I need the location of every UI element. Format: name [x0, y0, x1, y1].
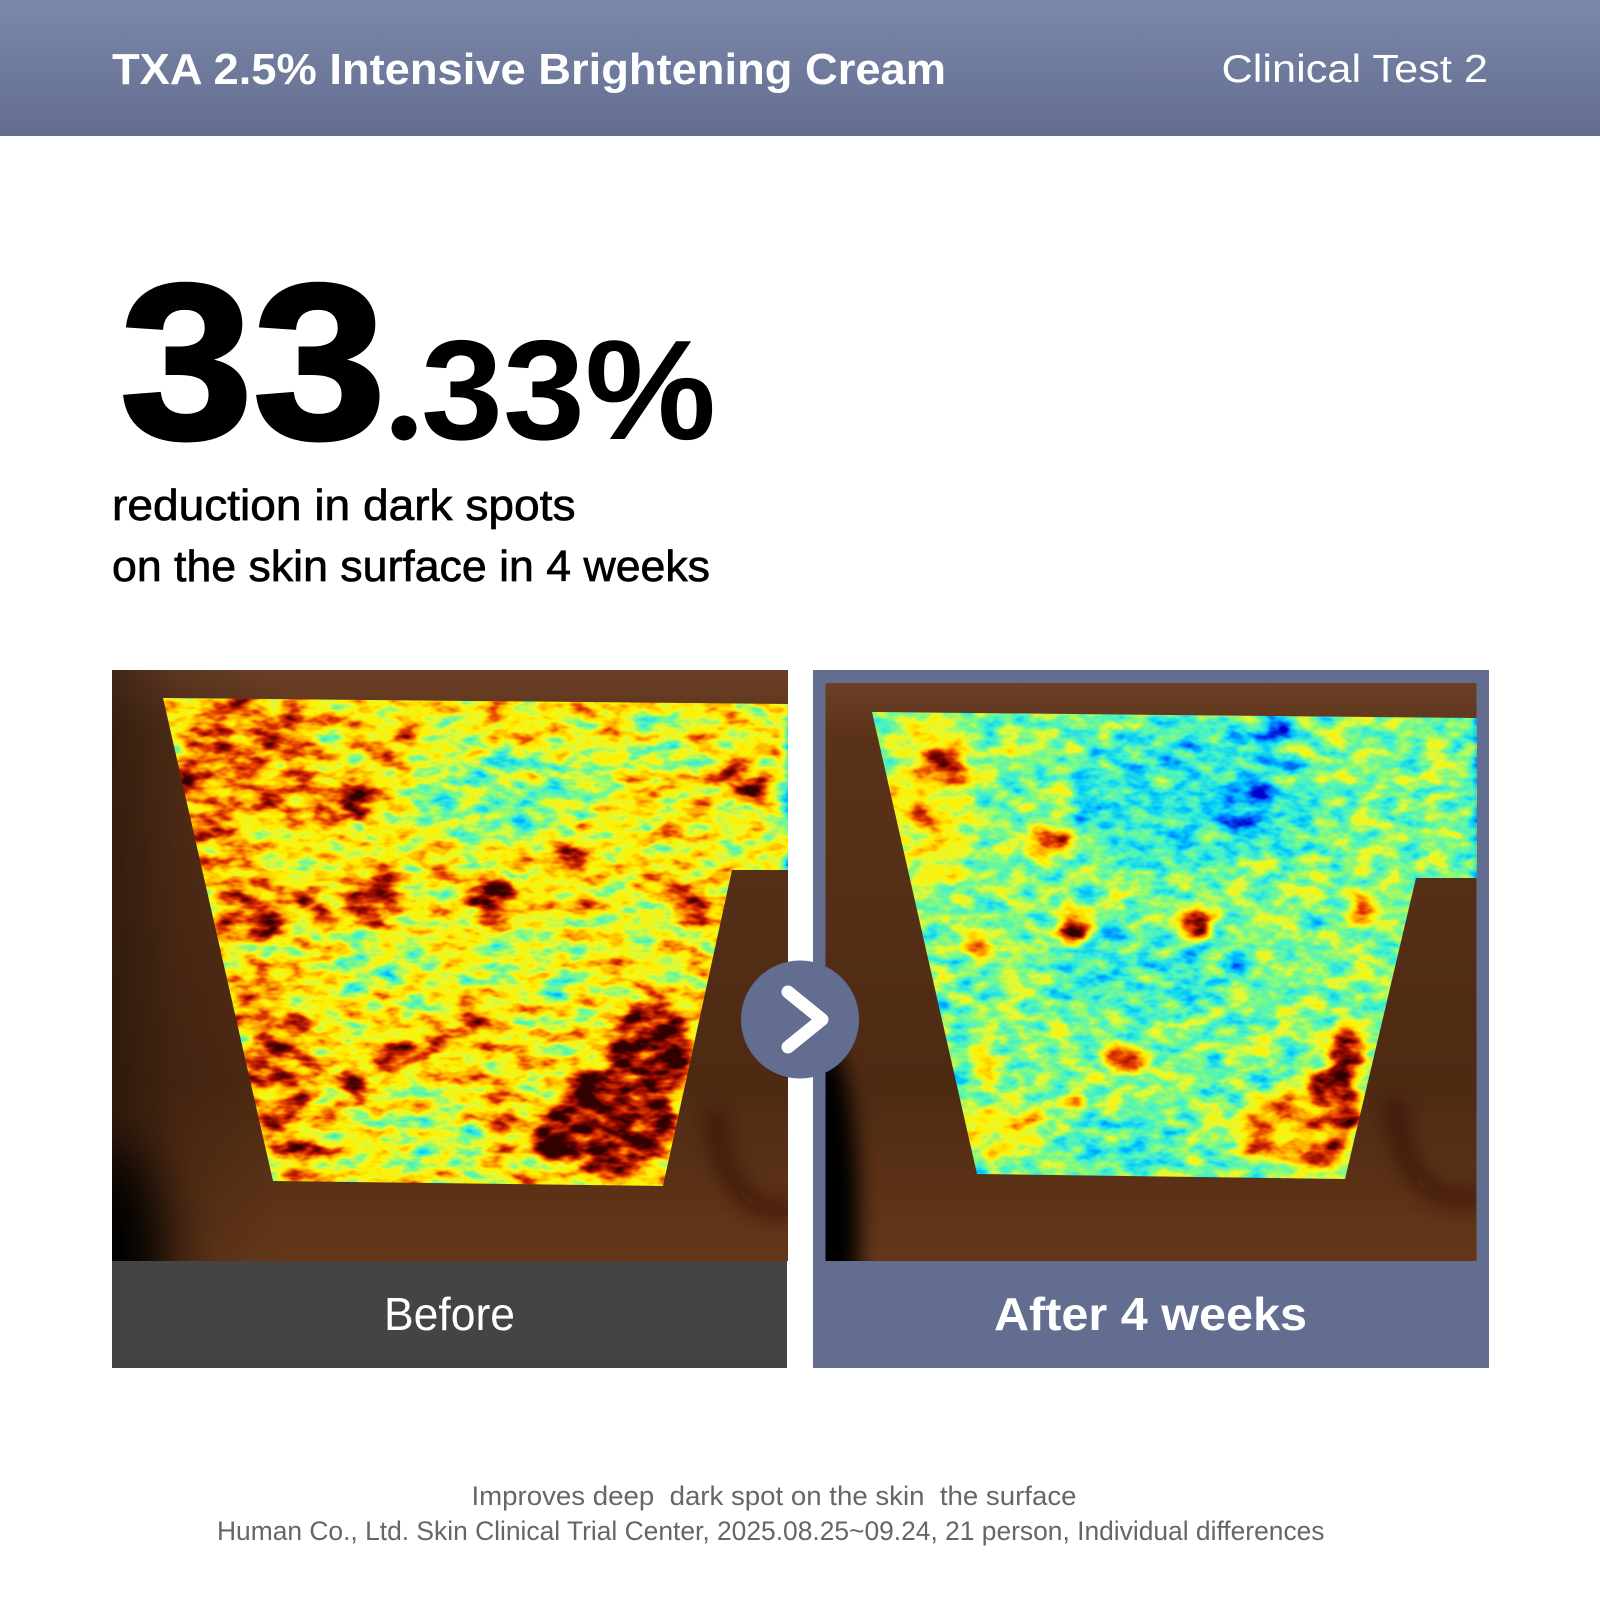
footnote: Improves deep dark spot on the skin the surface — [472, 1481, 1076, 1511]
footnote — [217, 1481, 1324, 1546]
product title: TXA 2.5% Intensive Brightening Cream — [112, 45, 946, 94]
decimals and percent: 33% — [421, 311, 716, 470]
after photo skin — [826, 683, 1476, 1261]
headline statistic — [120, 238, 716, 485]
before photo skin — [112, 670, 788, 1261]
large number 33: 33 — [120, 238, 386, 485]
arrow between panels — [741, 960, 859, 1078]
statistic description — [112, 481, 710, 591]
before label bar: Before — [384, 1288, 515, 1340]
panel: before — [112, 670, 788, 1368]
decimal point — [392, 416, 416, 440]
before label bar — [112, 1261, 787, 1368]
after label text: After 4 weeks — [994, 1288, 1307, 1340]
header bar — [0, 0, 1600, 136]
footnote: Human Co., Ltd. Skin Clinical Trial Center, 2025.08.25~09.24, 21 person, Individual differences — [217, 1516, 1324, 1546]
panel: after 4 weeks — [791, 670, 1489, 1420]
after heatmap — [872, 712, 1477, 1179]
statistic description: reduction in dark spots — [112, 481, 576, 530]
statistic description: on the skin surface in 4 weeks — [112, 542, 710, 591]
before heatmap — [163, 698, 788, 1186]
after panel frame — [813, 670, 1489, 1368]
clinical test label: Clinical Test 2 — [1222, 48, 1488, 91]
